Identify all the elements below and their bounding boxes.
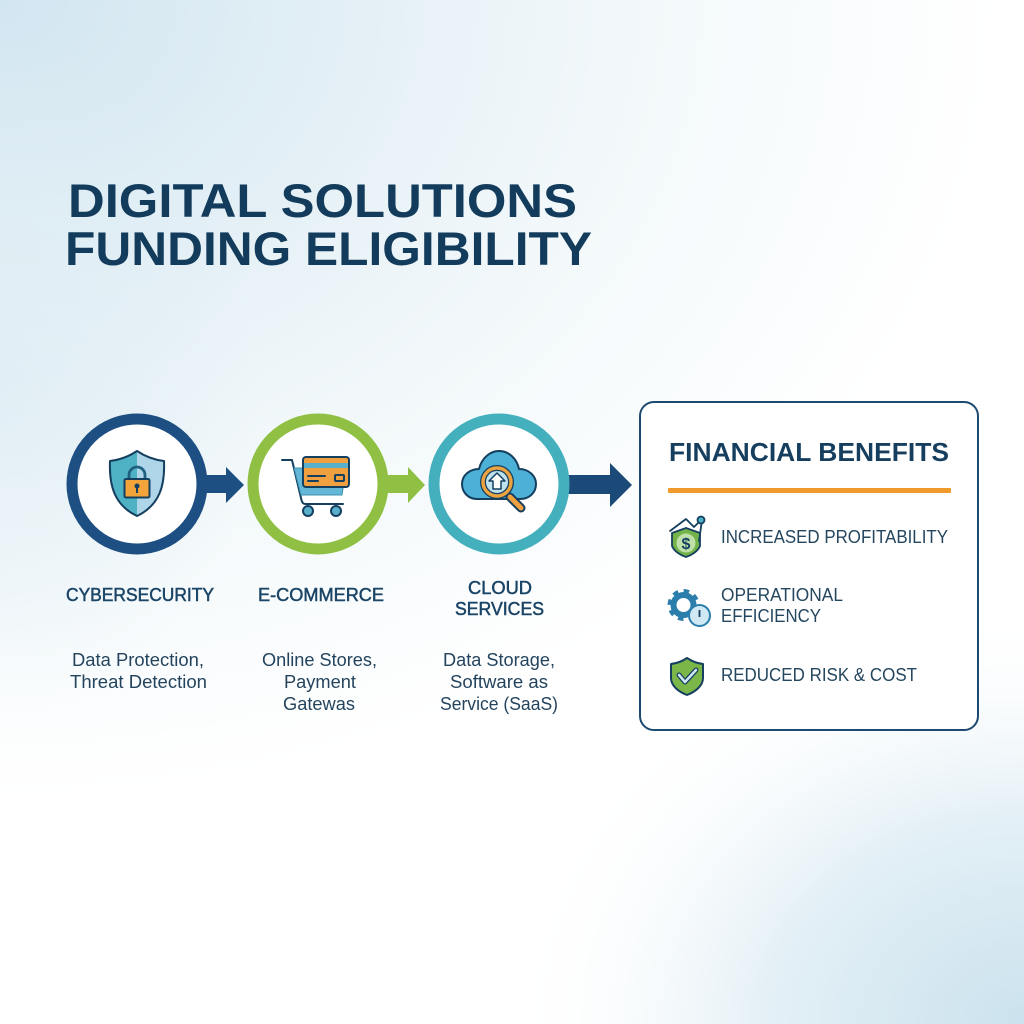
- label: cloud services: [455, 578, 544, 619]
- label: cloud services: SERVICES: [455, 599, 544, 619]
- label: e-commerce: E-COMMERCE: [258, 585, 384, 605]
- icon: shopping cart with card: [282, 457, 349, 516]
- description: e-commerce: Payment: [284, 672, 356, 692]
- description: e-commerce: Online Stores,: [262, 650, 377, 670]
- panel heading: FINANCIAL BENEFITS: [669, 437, 949, 467]
- description: cloud services: [440, 650, 558, 714]
- orange divider: [668, 488, 951, 493]
- description: cloud services: Service (SaaS): [440, 694, 558, 714]
- arrow: e-commerce to cloud: [386, 467, 425, 503]
- description: e-commerce: Gatewas: [283, 694, 355, 714]
- icon: check shield: [671, 658, 703, 695]
- description: cybersecurity: [70, 650, 207, 692]
- benefit: operational efficiency: OPERATIONAL: [721, 585, 843, 605]
- title: DIGITAL SOLUTIONS: [68, 174, 577, 227]
- title: [65, 174, 592, 275]
- icon: profit shield: [670, 516, 704, 557]
- benefit: reduced risk and cost: REDUCED RISK & COST: [721, 665, 917, 685]
- description: cybersecurity: Threat Detection: [70, 672, 207, 692]
- panel: financial benefits: [640, 402, 978, 730]
- label: cloud services: CLOUD: [468, 578, 532, 598]
- description: cybersecurity: Data Protection,: [72, 650, 204, 670]
- arrow: cybersecurity to e-commerce: [205, 467, 244, 503]
- title: FUNDING ELIGIBILITY: [65, 222, 592, 275]
- circle: cloud services: [434, 419, 564, 549]
- icon: gear and clock: [670, 591, 710, 626]
- description: cloud services: Software as: [450, 672, 548, 692]
- icon: cloud with magnifier: [462, 451, 536, 508]
- circle: cybersecurity: [72, 419, 202, 549]
- benefit: increased profitability: INCREASED PROFITABILITY: [721, 527, 948, 547]
- benefit: operational efficiency: EFFICIENCY: [721, 606, 821, 626]
- description: cloud services: Data Storage,: [443, 650, 555, 670]
- label: cybersecurity: CYBERSECURITY: [66, 585, 214, 605]
- arrow: cloud to benefits: [567, 463, 632, 507]
- circle: e-commerce: [253, 419, 383, 549]
- description: e-commerce: [262, 650, 377, 714]
- benefit: operational efficiency: [721, 585, 843, 626]
- icon: profit shield: $: [682, 536, 691, 553]
- icon: shield with padlock: [110, 451, 164, 516]
